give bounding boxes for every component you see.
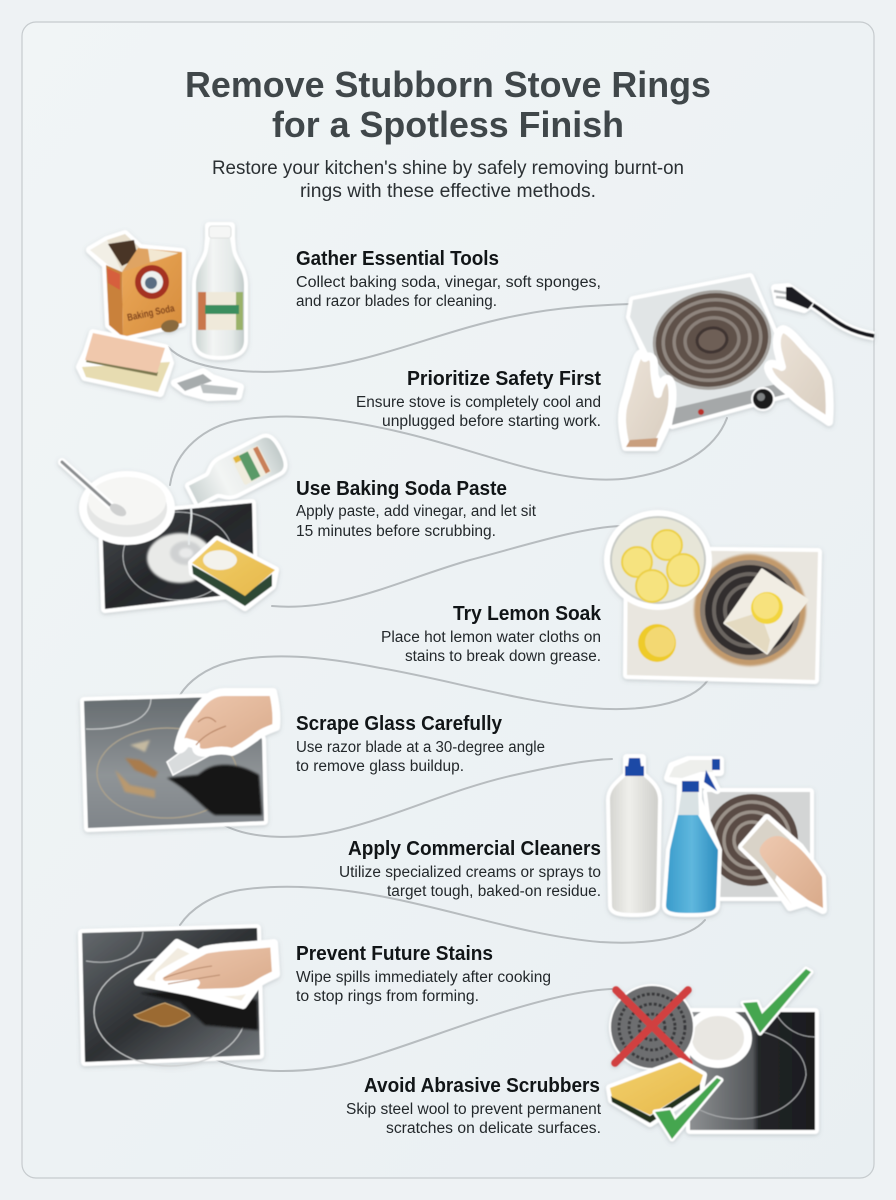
step 4 text: lemon soak (381, 603, 602, 665)
step 6 text: commercial cleaners (339, 838, 601, 900)
icon: yellow sponge (610, 1062, 703, 1123)
illustration: baking soda paste on cooktop (62, 434, 288, 609)
illustration: scraping glass with razor (84, 692, 276, 828)
step 8 text: avoid abrasives: scratches on delicate surfaces. (386, 1120, 601, 1137)
icon: plug and cord (774, 287, 874, 336)
title: for a Spotless Finish (272, 104, 624, 145)
illustration: lemon soak (608, 514, 818, 680)
photo: burner being wiped (706, 792, 810, 897)
step 2 text: prioritize safety: unplugged before starting work. (382, 413, 601, 430)
step 1 text: gather essential tools (296, 248, 601, 310)
step 2 text: prioritize safety: Prioritize Safety First (407, 368, 601, 390)
icon: mixing bowl and spoon (62, 462, 171, 541)
illustration: avoid abrasive scrubbers (609, 969, 815, 1139)
subtitle: rings with these effective methods. (300, 180, 596, 202)
icon: vinegar bottle (196, 226, 244, 356)
title: Remove Stubborn Stove Rings (185, 64, 711, 105)
icon: hand holding razor (178, 692, 276, 753)
subtitle: Restore your kitchen's shine by safely removing burnt-on (212, 157, 684, 179)
step 3 text: baking soda paste (296, 478, 537, 540)
icon: sponges (80, 333, 170, 393)
title (185, 64, 711, 145)
icon: cloth (138, 943, 257, 1005)
icon: left glove (622, 353, 673, 447)
icon: soft white pad (688, 1012, 748, 1064)
photo: ceramic cooktop with paste (102, 503, 254, 609)
step 3 text: baking soda paste: Use Baking Soda Paste (296, 478, 507, 500)
step 7 text: prevent stains (296, 943, 551, 1005)
step 4 text: lemon soak: Place hot lemon water cloths on (381, 629, 601, 646)
step 6 text: commercial cleaners: Utilize specialized creams or sprays to (339, 864, 601, 881)
icon: hot plate (630, 277, 790, 425)
illustration: commercial cleaners (610, 758, 823, 913)
icon: red cross (615, 990, 689, 1063)
step 8 text: avoid abrasives: Skip steel wool to prevent permanent (346, 1101, 602, 1118)
photo: burner with lemon cloth (627, 550, 818, 680)
step 3 text: baking soda paste: Apply paste, add vinegar, and let sit (296, 503, 537, 520)
icon: cream cleaner bottle (610, 758, 658, 913)
illustration: baking soda, vinegar, sponges, razor blades (80, 226, 244, 397)
step 2 text: prioritize safety (356, 368, 601, 430)
step 1 text: gather essential tools: Collect baking soda, vinegar, soft sponges, (296, 274, 601, 291)
photo: cooktop with spill (82, 928, 260, 1066)
step 6 text: commercial cleaners: target tough, baked-on residue. (387, 883, 601, 900)
step 7 text: prevent stains: Prevent Future Stains (296, 943, 493, 965)
icon: pouring vinegar bottle (185, 434, 288, 512)
icon: baking soda box: Baking Soda (126, 303, 176, 324)
icon: hand wiping with cloth (742, 818, 823, 910)
step 7 text: prevent stains: to stop rings from forming. (296, 988, 479, 1005)
step 2 text: prioritize safety: Ensure stove is completely cool and (356, 394, 601, 411)
icon: bowl of lemon water (608, 514, 708, 606)
photo: glossy cooktop (690, 1012, 815, 1130)
icon: check mark bottom (655, 1078, 721, 1139)
step 8 text: avoid abrasives: Avoid Abrasive Scrubbers (364, 1075, 600, 1097)
step 4 text: lemon soak: Try Lemon Soak (453, 603, 602, 625)
step 1 text: gather essential tools: Gather Essential Tools (296, 248, 499, 270)
step 1 text: gather essential tools: and razor blades for cleaning. (296, 293, 497, 310)
icon: steel wool (609, 984, 695, 1070)
icon: blue spray bottle (666, 759, 720, 913)
subtitle (212, 157, 684, 202)
step 7 text: prevent stains: Wipe spills immediately after cooking (296, 969, 551, 986)
step 5 text: scrape glass: to remove glass buildup. (296, 758, 464, 775)
icon: lemon half (638, 624, 676, 662)
step 6 text: commercial cleaners: Apply Commercial Cleaners (348, 838, 601, 860)
step 5 text: scrape glass: Scrape Glass Carefully (296, 713, 503, 735)
icon: razor blades (175, 372, 240, 397)
step 3 text: baking soda paste: 15 minutes before scrubbing. (296, 523, 496, 540)
step 8 text: avoid abrasives (346, 1075, 602, 1137)
step 5 text: scrape glass (296, 713, 545, 775)
icon: right glove (768, 329, 830, 422)
step 5 text: scrape glass: Use razor blade at a 30-degree angle (296, 739, 545, 756)
illustration: wiping spill from cooktop (82, 928, 276, 1066)
photo: stained glass cooktop (84, 696, 264, 828)
icon: wiping hand (159, 943, 276, 993)
step 4 text: lemon soak: stains to break down grease. (405, 648, 601, 665)
icon: check mark top (743, 969, 811, 1033)
icon: yellow sponge with foam (192, 540, 275, 607)
connector curves (168, 304, 727, 1071)
icon: baking soda box (90, 234, 182, 337)
icon: vinegar stream (189, 508, 191, 545)
icon: razor blade (167, 740, 210, 775)
illustration: stove hot plate, gloves, plug (622, 277, 874, 447)
